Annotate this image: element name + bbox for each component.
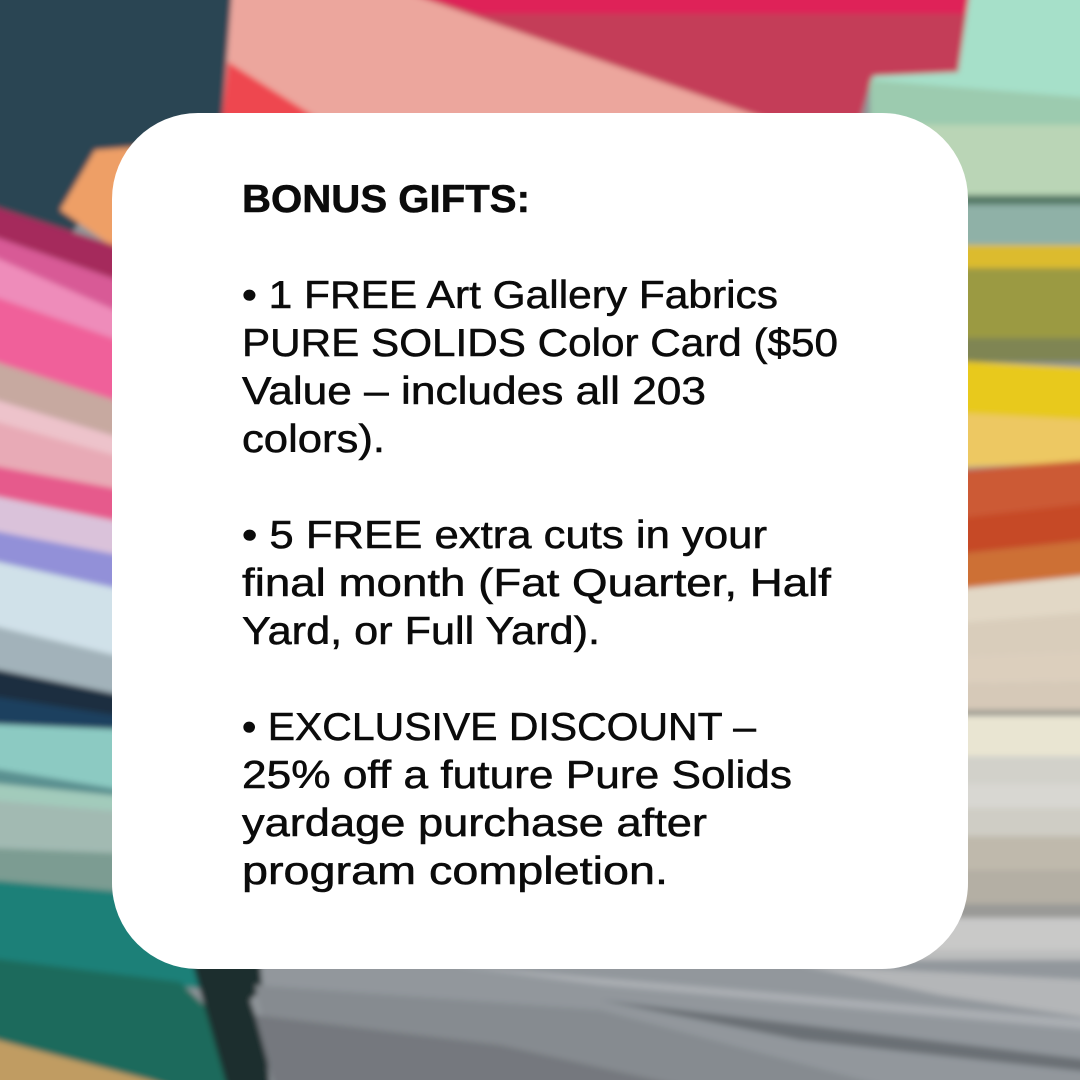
text block: extra cuts gift xyxy=(242,514,831,653)
text block: color card gift: Value – includes all 203 xyxy=(242,370,706,413)
text block: color card gift: colors). xyxy=(242,418,385,461)
fabric: top bright pink strip xyxy=(400,0,968,14)
fabric: top salmon xyxy=(222,0,780,120)
text block: color card gift: • 1 FREE Art Gallery Fabrics xyxy=(242,274,778,317)
text block: exclusive discount gift: 25% off a future Pure Solids xyxy=(242,754,792,797)
fabric: top right mint xyxy=(870,0,1080,100)
heading: bonus gifts: BONUS GIFTS: xyxy=(242,178,530,221)
fabric: right stripes xyxy=(900,125,1080,980)
fabric: bottom grey stacks xyxy=(190,955,1080,1080)
fabric: top crimson xyxy=(400,0,970,120)
text block: exclusive discount gift xyxy=(242,706,792,893)
text block: color card gift xyxy=(242,274,838,461)
text block: extra cuts gift: final month (Fat Quarter, Half xyxy=(242,562,831,605)
fabric: left stripes xyxy=(0,145,240,1080)
text block: extra cuts gift: • 5 FREE extra cuts in your xyxy=(242,514,767,557)
fabric: top left dark teal xyxy=(0,0,238,250)
fabric: top red xyxy=(222,62,320,120)
text block: exclusive discount gift: yardage purchase after xyxy=(242,802,707,845)
text block: color card gift: PURE SOLIDS Color Card ($50 xyxy=(242,322,838,365)
text block: exclusive discount gift: • EXCLUSIVE DISCOUNT – xyxy=(242,706,756,749)
text block: exclusive discount gift: program completion. xyxy=(242,850,668,893)
fabric: right sage xyxy=(870,80,1080,130)
text block: extra cuts gift: Yard, or Full Yard). xyxy=(242,610,600,653)
white card xyxy=(112,113,968,969)
